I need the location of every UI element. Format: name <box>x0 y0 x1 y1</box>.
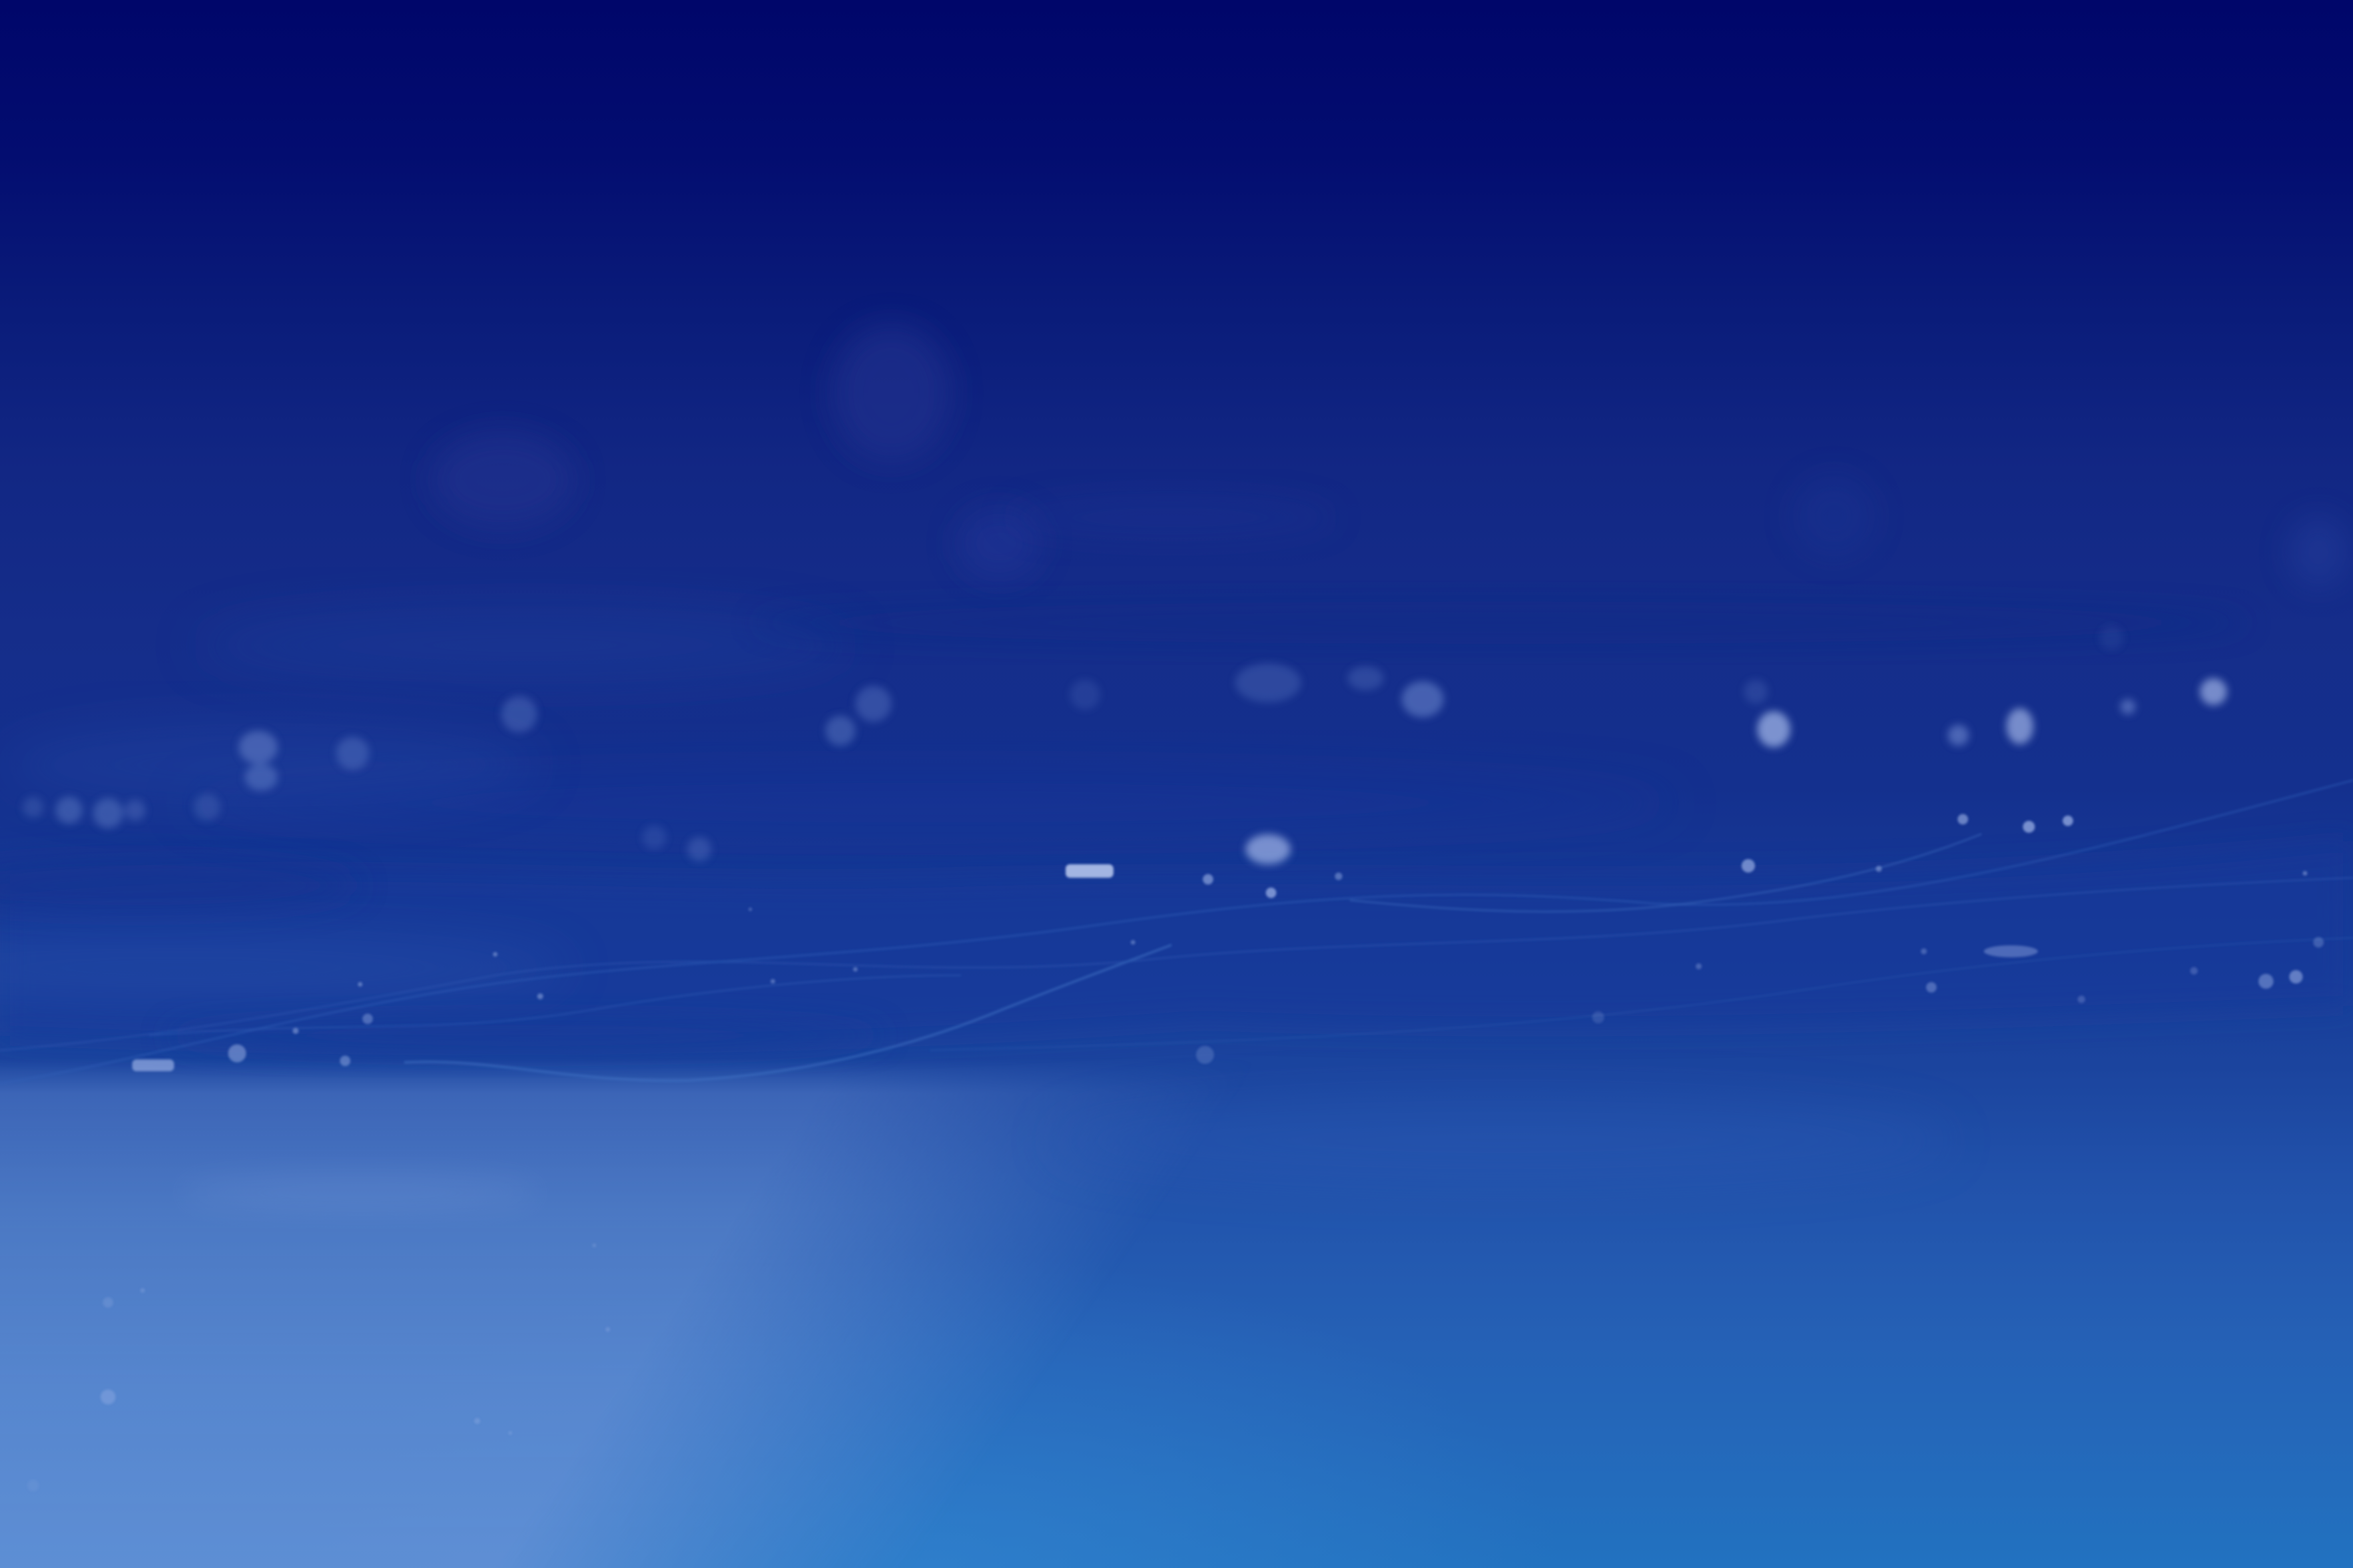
light haze: lower left and lower centre <box>0 1067 1179 1568</box>
soft out-of-focus glows in upper water <box>195 324 2348 684</box>
blurred bokeh droplets above the surface <box>23 626 2227 864</box>
wave ripple lines <box>0 780 2353 1083</box>
small sharp droplets on the surface <box>27 814 2324 1491</box>
darker water band at the surface <box>0 723 2353 1057</box>
